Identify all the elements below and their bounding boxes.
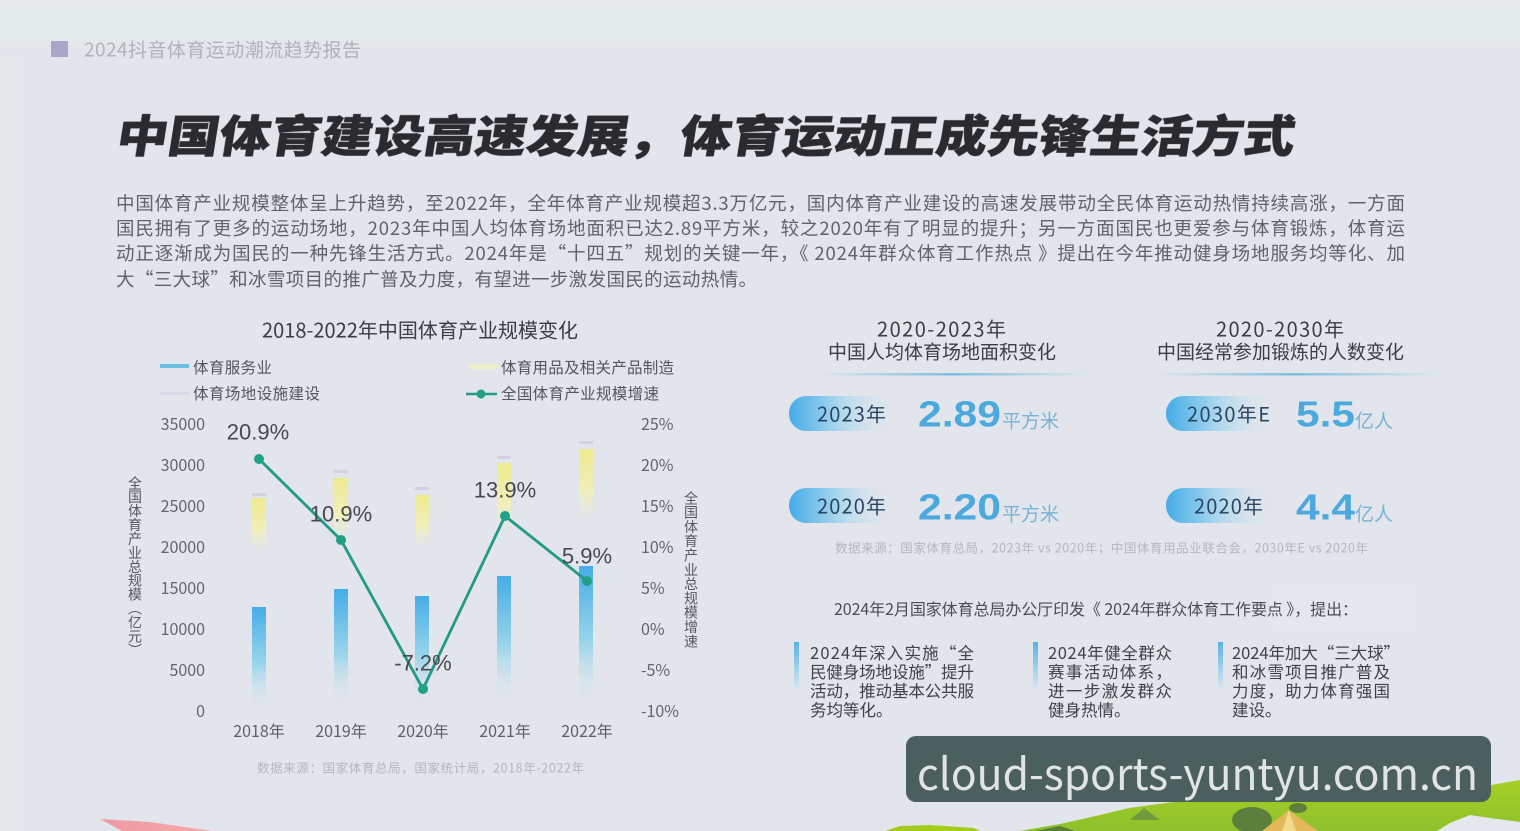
legend: 体育服务业 bbox=[193, 356, 272, 378]
x axis labels: 2022年 bbox=[561, 718, 613, 742]
panel: per-capita sports area bbox=[789, 314, 1090, 528]
left axis: 30000 bbox=[161, 452, 205, 476]
heading: 2020-2030年 bbox=[1216, 314, 1344, 342]
stats source: 数据来源：国家体育总局，2023年 vs 2020年；中国体育用品业联合会，2030年E vs 2020年 bbox=[835, 538, 1368, 556]
left axis: 35000 bbox=[161, 411, 205, 435]
growth labels: -7.2% bbox=[394, 650, 452, 676]
right axis: -5% bbox=[641, 657, 670, 681]
left axis: 0 bbox=[196, 698, 205, 722]
left axis: 15000 bbox=[161, 575, 205, 599]
right axis bbox=[641, 411, 679, 722]
policy item 2: 健身热情。 bbox=[1048, 697, 1130, 721]
policy item 3 bbox=[1218, 640, 1400, 721]
bars: sports goods manufacturing bbox=[252, 449, 593, 552]
growth line bbox=[254, 454, 592, 694]
right axis: 20% bbox=[641, 452, 674, 476]
stat 2020: 平方米 bbox=[1002, 500, 1059, 526]
policy item 2: 赛事活动体系， bbox=[1048, 659, 1172, 683]
panel: regular exercisers bbox=[1150, 314, 1440, 528]
policy item 3: 力度，助力体育强国 bbox=[1232, 678, 1390, 702]
legend bbox=[160, 356, 674, 404]
x axis labels bbox=[233, 718, 613, 742]
panel: industry scale chart bbox=[125, 314, 701, 776]
right axis: 5% bbox=[641, 575, 665, 599]
intro paragraph: 国民拥有了更多的运动场地，2023年中国人均体育场地面积已达2.89平方米，较之2020年有了明显的提升；另一方面国民也更爱参与体育锻炼，体育运 bbox=[116, 215, 1405, 241]
intro paragraph bbox=[116, 190, 1405, 292]
policy item 1: 务均等化。 bbox=[810, 697, 892, 721]
left axis: 5000 bbox=[169, 657, 205, 681]
panel: regular exercisers: 中国经常参加锻炼的人数变化 bbox=[1157, 338, 1404, 364]
x axis labels: 2019年 bbox=[315, 718, 367, 742]
x axis labels: 2020年 bbox=[397, 718, 449, 742]
bars: venue construction bbox=[252, 441, 593, 496]
policy item 1 bbox=[794, 640, 974, 721]
stat 2020 bbox=[789, 486, 1059, 528]
policy lead sentence: 2024年2月国家体育总局办公厅印发《 2024年群众体育工作要点 》，提出： bbox=[834, 596, 1358, 620]
policy item 1: 2024年深入实施“全 bbox=[810, 640, 974, 664]
left axis title: 全国体育产业总规模（亿元） bbox=[125, 475, 145, 657]
bars: sports services bbox=[252, 566, 593, 711]
left axis: 20000 bbox=[161, 534, 205, 558]
growth labels: 10.9% bbox=[310, 502, 372, 526]
stat 2020: 4.4 bbox=[1296, 486, 1355, 528]
policy item 2: 进一步激发群众 bbox=[1048, 678, 1172, 702]
right axis: -10% bbox=[641, 698, 679, 722]
header tag: 2024抖音体育运动潮流趋势报告 bbox=[84, 36, 361, 62]
stat 2030E: 亿人 bbox=[1355, 406, 1393, 434]
legend: 体育场地设施建设 bbox=[193, 382, 320, 404]
stat 2020 bbox=[1166, 486, 1393, 528]
left axis bbox=[161, 411, 205, 722]
stat 2020: 2020年 bbox=[817, 490, 886, 520]
right axis: 15% bbox=[641, 493, 674, 517]
right axis: 25% bbox=[641, 411, 674, 435]
stat 2020: 2020年 bbox=[1194, 490, 1263, 520]
growth labels: 20.9% bbox=[227, 420, 289, 444]
panel: per-capita sports area: 中国人均体育场地面积变化 bbox=[828, 338, 1056, 364]
title: 中国体育建设高速发展，体育运动正成先锋生活方式 bbox=[113, 101, 1301, 165]
stat 2030E bbox=[1166, 394, 1393, 434]
x axis labels: 2021年 bbox=[479, 718, 531, 742]
stat 2023: 2.89 bbox=[918, 394, 1001, 434]
right axis title: 全国体育产业总规模增速 bbox=[681, 490, 701, 649]
right axis: 10% bbox=[641, 534, 674, 558]
growth labels: 13.9% bbox=[474, 478, 536, 502]
intro paragraph: 大“三大球”和冰雪项目的推广普及力度，有望进一步激发国民的运动热情。 bbox=[116, 266, 757, 292]
policy item 1: 活动，推动基本公共服 bbox=[810, 678, 974, 702]
illustration: green hill with tent bbox=[885, 780, 1520, 831]
policy item 2 bbox=[1033, 640, 1172, 721]
stat 2030E: 5.5 bbox=[1296, 394, 1355, 434]
policy item 1: 民健身场地设施”提升 bbox=[810, 659, 974, 683]
chart title: 2018-2022年中国体育产业规模变化 bbox=[262, 314, 578, 344]
growth labels bbox=[227, 420, 612, 676]
left axis: 25000 bbox=[161, 493, 205, 517]
intro paragraph: 中国体育产业规模整体呈上升趋势，至2022年，全年体育产业规模超3.3万亿元，国内体育产业建设的高速发展带动全民体育运动热情持续高涨，一方面 bbox=[116, 190, 1405, 216]
policy item 3: 2024年加大“三大球” bbox=[1232, 640, 1400, 664]
stat 2023: 2023年 bbox=[817, 398, 886, 428]
policy item 3: 建设。 bbox=[1232, 697, 1282, 721]
x axis labels: 2018年 bbox=[233, 718, 285, 742]
stat 2020: 2.20 bbox=[918, 486, 1001, 528]
stat 2020: 亿人 bbox=[1355, 500, 1393, 526]
legend: 全国体育产业规模增速 bbox=[501, 382, 659, 404]
stat 2030E: 2030年E bbox=[1187, 398, 1270, 428]
intro paragraph: 动正逐渐成为国民的一种先锋生活方式。2024年是“十四五”规划的关键一年，《 2024年群众体育工作热点 》提出在今年推动健身场地服务均等化、加 bbox=[116, 240, 1405, 266]
heading: 2020-2023年 bbox=[877, 314, 1006, 342]
policy item 2: 2024年健全群众 bbox=[1048, 640, 1172, 664]
illustration: pink ribbon bbox=[100, 819, 212, 831]
chart source: 数据来源：国家体育总局，国家统计局，2018年-2022年 bbox=[257, 758, 584, 776]
stat 2023 bbox=[789, 394, 1059, 434]
watermark: cloud-sports-yuntyu.com.cn bbox=[917, 739, 1478, 803]
left axis: 10000 bbox=[161, 616, 205, 640]
right axis: 0% bbox=[641, 616, 665, 640]
stat 2023: 平方米 bbox=[1002, 406, 1059, 434]
legend: 体育用品及相关产品制造 bbox=[501, 356, 674, 378]
growth labels: 5.9% bbox=[562, 544, 612, 568]
policy item 3: 和冰雪项目推广普及 bbox=[1232, 659, 1390, 683]
